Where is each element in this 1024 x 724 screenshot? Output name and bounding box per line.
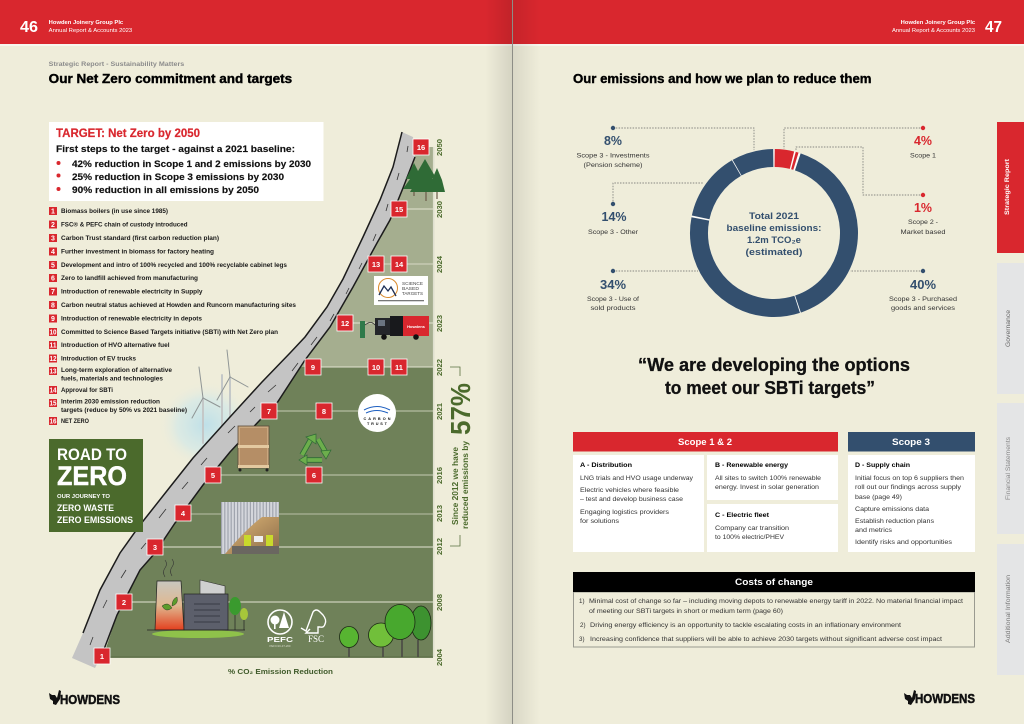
milestone list: 8 [51,302,55,310]
logo: PEFC: PEFC [267,637,293,644]
panel: road to zero badge: ZERO EMISSIONS [57,515,133,525]
label: 4 percent [910,126,937,160]
panel: B renewable energy: energy. Invest in solar generation [715,484,820,491]
illustration: cabinet [238,426,269,472]
logo: PEFC [267,610,293,648]
header band: left page: 46 [20,19,38,36]
axis: years: 2016 [435,467,444,484]
logo: Science Based Targets: TARGETS [402,291,423,296]
pull quote [638,355,910,398]
logo: Carbon Trust [358,394,396,432]
label: 4 percent: 4% [914,134,932,148]
milestone list: 6 [51,276,55,282]
label: 1 percent: Market based [900,229,946,236]
marker: milestone numbers: 13 [372,260,380,269]
label: 4 percent: Scope 1 [910,153,937,160]
donut centre label: 1.2m TCO₂e [747,235,801,245]
callout: 57 percent reduction: 57% [445,383,476,435]
wind turbines [192,350,248,443]
tab: Financial Statements [997,403,1024,534]
marker: milestone numbers: 10 [372,363,380,372]
callout: 57 percent reduction: Since 2012 we have [450,447,460,525]
logo: FSC [301,610,326,644]
axis: years: 2030 [435,201,444,218]
axis: years: 2012 [435,538,444,555]
donut centre label: Total 2021 [749,211,799,221]
logo: Howdens left: HOWDENS [60,692,120,707]
panel: costs of change [573,572,975,647]
marker: milestone numbers: 15 [395,205,403,214]
milestone list: 1 [51,208,55,216]
panel: D supply chain: Initial focus on top 6 suppliers then [855,475,965,482]
panel: costs of change: Costs of change [735,577,813,587]
tab: Governance: Governance [1006,309,1012,347]
milestone list: Interim 2030 emission reduction [61,399,160,406]
panel: C electric fleet [707,504,838,552]
illustration: factory [147,559,248,638]
label: 14 percent: Scope 3 - Other [588,229,638,236]
marker: milestone numbers: 5 [211,471,215,480]
pull quote: to meet our SBTi targets” [665,378,875,398]
label: 34 percent [587,269,639,312]
panel: target box: TARGET: Net Zero by 2050 [56,126,200,140]
milestone list: 14 [50,388,57,394]
milestone list: 15 [50,400,57,408]
panel: costs of change: Increasing confidence that suppliers will be able to achieve 2030 targets without significant adverse cost impact [590,636,942,643]
panel: A distribution: Engaging logistics providers [580,509,669,516]
illustration: pine trees [403,159,445,201]
donut centre label: baseline emissions: [726,223,822,233]
milestone list: Introduction of renewable electricity in depots [61,316,203,323]
illustration: warehouse [221,517,279,554]
donut centre label: (estimated) [746,247,802,257]
marker: milestone numbers: 16 [417,143,425,152]
axis: years: 2008 [435,594,444,611]
logo: PEFC: PEFC/16-37-200 [270,644,291,648]
label: 8 percent [576,126,650,169]
label: 14 percent [588,202,638,236]
tab: Financial Statements: Financial Statements [1006,437,1012,500]
milestone list: Committed to Science Based Targets initiative (SBTi) with Net Zero plan [61,329,278,336]
panel: D supply chain: roll out our findings across supply [855,484,962,491]
marker: milestone numbers: 4 [181,509,186,518]
icon: recycling [299,434,331,465]
chart: emissions donut [672,131,876,335]
milestone list: Introduction of HVO alternative fuel [61,342,170,349]
logo: Howdens left [49,690,120,707]
panel: D supply chain: and metrics [855,527,892,534]
panel: costs of change: of meeting our SBTi targets in short or medium term (page 60) [589,608,783,615]
axis: years [435,139,444,666]
milestone list: FSC® & PEFC chain of custody introduced [61,222,188,229]
panel: road to zero badge: OUR JOURNEY TO [57,494,111,500]
panel: A distribution: A - Distribution [580,462,632,469]
panel: scope 1 and 2 header: Scope 1 & 2 [678,437,732,447]
marker: milestone numbers: 8 [322,407,326,416]
panel: costs of change: Minimal cost of change so far – including moving depots to renewable energy tariff in 2022. No material financial impact [589,598,963,605]
header band: right page [512,0,1024,46]
panel: road to zero badge: ZERO WASTE [57,503,114,513]
axis: years: 2024 [435,255,444,273]
milestone list: 5 [51,262,55,270]
panel: D supply chain: Identify risks and opportunities [855,539,952,546]
panel: B renewable energy: B - Renewable energy [715,462,789,469]
panel: D supply chain: Establish reduction plans [855,518,934,525]
panel: target box: 25% reduction in Scope 3 emissions by 2030 [72,172,284,183]
label: 34 percent: 34% [600,278,626,292]
tab: Strategic Report: Strategic Report [1005,159,1011,215]
panel: C electric fleet: to 100% electric/PHEV [715,534,785,541]
milestone list: Long-term exploration of alternative [61,367,173,374]
road centre dashes [90,146,408,645]
panel: scope 3 header [848,432,975,452]
milestone list: Biomass boilers (in use since 1985) [61,208,168,215]
label: 8 percent: (Pension scheme) [584,162,642,169]
milestone list: 2 [51,222,55,229]
milestone list: Approval for SBTi [61,387,113,394]
milestone list: targets (reduce by 50% vs 2021 baseline) [61,407,187,414]
milestone list: fuels, materials and technologies [61,376,164,383]
label: 40 percent: 40% [910,278,936,292]
header band: left page: Howden Joinery Group Plc [49,20,124,26]
panel: road to zero badge [49,439,143,532]
marker: milestone numbers: 2 [122,598,126,607]
panel: target box: First steps to the target - against a 2021 baseline: [56,144,295,155]
green field: lower section [103,367,433,657]
milestone list: 11 [50,342,57,350]
panel: costs of change: 3) [579,636,585,643]
panel: target box [49,122,324,201]
marker: milestone numbers: 14 [395,260,404,269]
milestone list: 4 [51,249,55,256]
donut centre label [726,211,822,257]
header band: right page: Annual Report & Accounts 2023 [892,28,975,34]
section label: Strategic Report - Sustainability Matters [49,61,185,68]
logo: Carbon Trust: CARBON [364,417,391,421]
callout: 57 percent reduction: reduced emissions by [460,441,470,529]
panel: D supply chain: base (page 49) [855,494,902,501]
marker: milestone numbers: 11 [395,363,403,372]
panel: road to zero badge: ROAD TO [57,445,127,464]
tab: Additional Information: Additional Information [1006,575,1012,643]
chart: road to zero [72,132,445,668]
leader lines [613,128,923,271]
axis: years: 2004 [435,648,444,666]
milestone list: Further investment in biomass for factory heating [61,249,214,256]
marker: milestone numbers: 9 [311,363,315,372]
panel: costs of change: 1) [579,598,585,605]
panel: D supply chain [848,455,975,552]
label: 40 percent: goods and services [891,305,955,312]
panel: target box: 42% reduction in Scope 1 and 2 emissions by 2030 [72,159,311,170]
callout: 57 percent reduction [445,367,476,546]
milestone list: 16 [50,418,57,426]
marker: milestone numbers: 12 [341,319,349,328]
panel: A distribution [573,455,704,552]
label: 8 percent: Scope 3 - Investments [576,153,650,160]
heading: net zero commitment: Our Net Zero commitment and targets [49,71,292,86]
field edges and year lines [103,147,434,657]
tab: Additional Information [997,544,1024,675]
milestone list: 3 [51,236,55,242]
panel: costs of change: 2) [580,622,586,629]
label: 34 percent: sold products [590,305,636,312]
pull quote: “We are developing the options [638,355,910,375]
milestone list: Carbon neutral status achieved at Howden and Runcorn manufacturing sites [61,302,297,309]
axis: years: 2013 [435,505,444,522]
milestone list: Development and intro of 100% recycled and 100% recyclable cabinet legs [61,262,288,269]
illustration: electric truck [360,316,429,340]
marker: milestone numbers: 1 [100,652,104,661]
panel: target box: 90% reduction in all emissions by 2050 [72,185,259,196]
axis: years: 2021 [435,403,444,420]
marker: milestone numbers: 3 [153,543,157,552]
milestone list: Carbon Trust standard (first carbon reduction plan) [61,235,219,242]
tab: Strategic Report [997,122,1024,253]
label: 34 percent: Scope 3 - Use of [587,296,639,303]
milestone list [49,207,297,426]
panel: A distribution: – test and develop business case [580,496,684,503]
wind turbine sky glow [158,381,254,469]
logo: Science Based Targets [374,276,428,305]
marker: milestone numbers: 7 [267,407,271,416]
panel: A distribution: LNG trials and HVO usage underway [580,475,694,482]
milestone list: 7 [51,289,55,296]
panel: A distribution: for solutions [580,518,619,525]
milestone list: Zero to landfill achieved from manufacturing [61,275,198,282]
marker: milestone numbers: 6 [312,471,316,480]
header band: left page [0,0,512,46]
milestone list: 9 [51,316,55,323]
panel: scope 1 and 2 header [573,432,838,452]
label: 1 percent [900,193,946,236]
panel: C electric fleet: C - Electric fleet [715,512,770,519]
logo: Science Based Targets: BASED [402,286,420,291]
green field: upper section [300,147,433,367]
illustration: electric truck: Howdens [407,324,426,329]
panel: A distribution: Electric vehicles where feasible [580,487,680,494]
header band: left page: Annual Report & Accounts 2023 [49,28,132,34]
milestone list: Introduction of renewable electricity in Supply [61,289,203,296]
illustration: trees [340,604,431,657]
label: 8 percent: 8% [604,134,622,148]
panel: C electric fleet: Company car transition [715,525,790,532]
label: 40 percent [889,269,958,312]
label: 1 percent: 1% [914,201,932,215]
logo: FSC: FSC [308,634,324,644]
milestone list: 13 [50,368,57,376]
axis: years: 2050 [435,139,444,156]
logo: Carbon Trust: TRUST [367,422,388,426]
marker: milestone numbers [94,139,429,664]
axis title: % CO₂ Emission Reduction [228,667,333,676]
header band: right page: Howden Joinery Group Plc [901,20,976,26]
panel: B renewable energy: All sites to switch 100% renewable [715,475,822,482]
tab: Governance [997,263,1024,394]
axis: years: 2023 [435,315,444,332]
panel: scope 3 header: Scope 3 [892,437,930,447]
logo: Howdens right: HOWDENS [915,691,975,706]
panel: costs of change: Driving energy efficiency is an opportunity to tackle escalating costs in an inflationary environment [590,622,901,629]
milestone list: Introduction of EV trucks [61,356,137,363]
label: 14 percent: 14% [602,210,626,224]
label: 1 percent: Scope 2 - [908,219,938,226]
milestone list: 12 [50,356,57,363]
panel: D supply chain: Capture emissions data [855,506,930,513]
milestone list: 10 [50,330,57,336]
road edges [83,132,415,652]
milestone list: NET ZERO [61,418,89,425]
panel: B renewable energy [707,455,838,500]
header band: right page: 47 [985,19,1002,36]
label: 40 percent: Scope 3 - Purchased [889,296,958,303]
panel: road to zero badge: ZERO [57,461,127,491]
heading: emissions: Our emissions and how we plan to reduce them [573,71,872,86]
road [72,132,415,668]
panel: D supply chain: D - Supply chain [855,462,910,469]
axis: years: 2022 [435,359,444,376]
logo: Science Based Targets: SCIENCE [402,281,423,286]
